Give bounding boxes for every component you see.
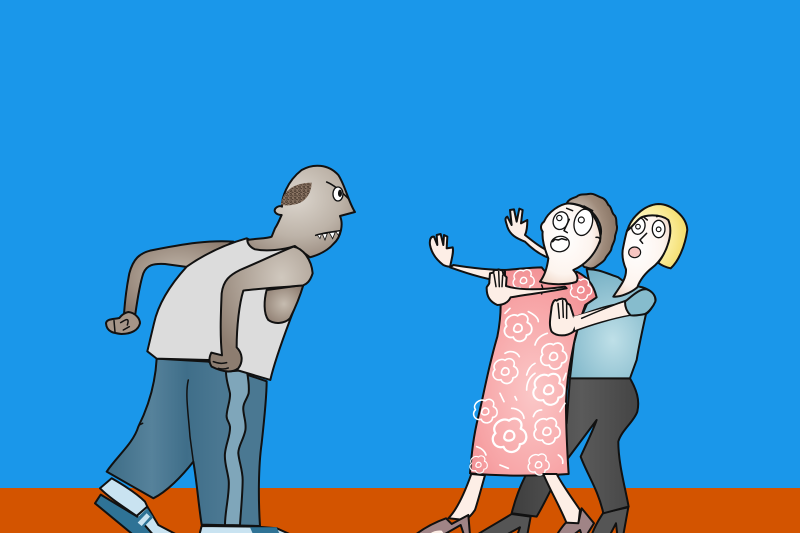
orange ground band bbox=[0, 488, 800, 533]
figure: angry man bbox=[95, 166, 355, 533]
first woman's dress bbox=[470, 267, 597, 476]
man's trousers bbox=[107, 359, 267, 526]
first woman's ear bbox=[596, 237, 600, 244]
second woman's blond hair bbox=[627, 204, 687, 268]
second woman's shoes bbox=[477, 507, 628, 533]
second woman's neck and face bbox=[613, 211, 672, 297]
second woman's sleeve cuff bbox=[625, 289, 655, 316]
second woman's forearm and hand across first woman's chest bbox=[487, 269, 567, 305]
man's front arm and hand bbox=[209, 247, 313, 371]
first woman's eyes bbox=[551, 206, 595, 238]
second woman's trousers bbox=[512, 377, 638, 517]
man's torso skin at armhole bbox=[265, 285, 303, 323]
man's right shoe bbox=[199, 526, 292, 533]
first woman's legs bbox=[448, 474, 580, 525]
first woman's raised back hand bbox=[505, 209, 550, 258]
second woman's tee shirt bbox=[570, 269, 656, 378]
man's back arm and fist bbox=[106, 241, 233, 334]
second woman's eyes bbox=[630, 215, 665, 243]
first woman's neck and face bbox=[540, 203, 601, 284]
first woman's shoes bbox=[415, 508, 594, 533]
first woman's screaming mouth bbox=[549, 235, 571, 253]
man's left shoe bbox=[95, 478, 177, 533]
figure: two frightened women bbox=[415, 194, 687, 533]
dress floral pattern bbox=[470, 270, 592, 475]
man's stubble hair patch bbox=[281, 183, 312, 205]
first woman's curly hair bbox=[567, 194, 617, 268]
man's sleeveless vest bbox=[147, 238, 303, 380]
second woman's front arm and hand bbox=[550, 289, 655, 335]
second woman's open mouth bbox=[629, 247, 641, 258]
trouser side stripe bbox=[225, 370, 249, 525]
first woman's outstretched arm and hand bbox=[430, 234, 507, 282]
man's angry brow and eye bbox=[327, 182, 348, 201]
dress collar line bbox=[542, 285, 565, 294]
man's snarling mouth bbox=[316, 231, 341, 240]
man's head and neck bbox=[247, 166, 355, 257]
